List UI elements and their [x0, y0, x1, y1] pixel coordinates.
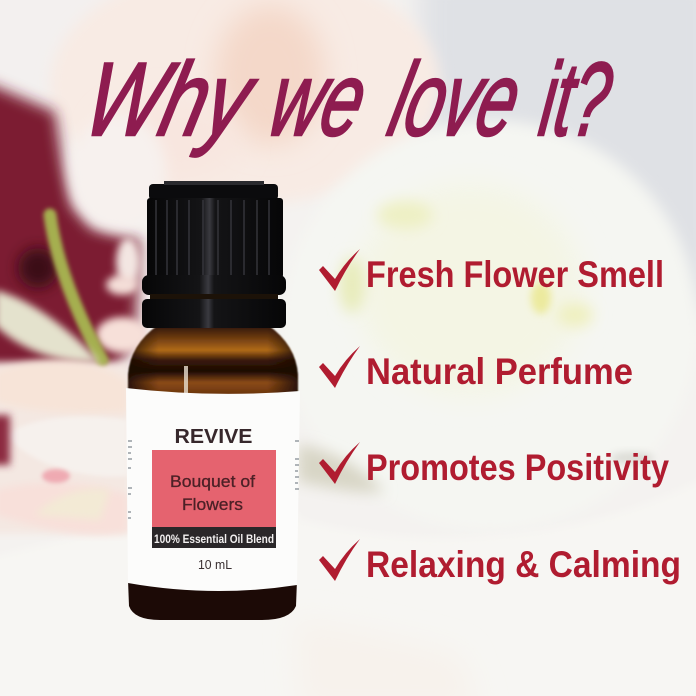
benefit: natural perfume: Natural Perfume: [366, 351, 633, 392]
background: white peony: [282, 120, 696, 530]
benefit: fresh flower smell: Fresh Flower Smell: [366, 254, 664, 295]
label: product name: Bouquet of: [170, 472, 255, 491]
background: pale pink rose: [50, 0, 440, 205]
bottle: white label: [126, 388, 300, 591]
label: product name: Flowers: [182, 495, 243, 514]
bottle: glass highlight: [184, 366, 188, 394]
title: [74, 41, 618, 158]
background: pink lily: [0, 290, 128, 534]
bottle: black cap: [142, 181, 286, 328]
background: marble table: [0, 444, 696, 696]
title: Why: [74, 41, 268, 158]
background: lily base: [0, 362, 130, 534]
label: strip text: 100% Essential Oil Blend: [154, 534, 274, 546]
label: product name: [170, 472, 255, 514]
benefits list: [319, 249, 681, 585]
label: black strip: [152, 527, 276, 548]
bottle: amber glass shoulder: [128, 325, 298, 395]
label: brand name: REVIVE: [174, 425, 252, 448]
label: volume: 10 mL: [198, 557, 232, 572]
title: we: [259, 41, 378, 158]
product bottle: [126, 181, 300, 620]
background: rose lower lobes: [70, 114, 166, 353]
background: green stem: [50, 215, 102, 360]
title: love: [379, 41, 532, 158]
label: pink panel: [152, 450, 276, 527]
bottle: bottom base: [128, 580, 297, 620]
title: it?: [534, 41, 618, 158]
label: side print: [128, 441, 299, 518]
background: dark red rose: [0, 80, 140, 475]
